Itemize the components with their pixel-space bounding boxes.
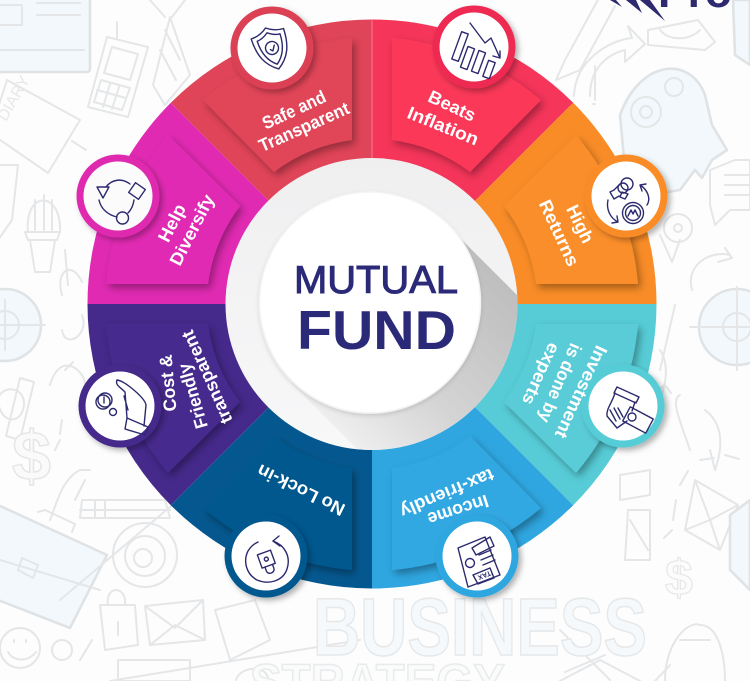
panel: Investment is done by experts [504,324,664,473]
label: Help Diversify: Diversify [166,191,218,269]
label: Cost Friendly transparent: Cost & [156,354,180,412]
icon: hand with coins [96,380,148,435]
icon: hand with cash [607,387,653,433]
label: Income tax-friendly: Income [425,491,491,529]
panel: Income tax-friendly [392,436,541,598]
wheel sectors [88,20,656,588]
icon: shield [249,23,295,74]
icon: unlock cycle [246,536,288,582]
label: Investment is done by experts: experts [518,340,564,408]
center hub [226,158,518,450]
label: No Lock-in: No Lock-in [254,460,348,520]
label: Investment is done by experts: is done by [534,340,586,426]
title: MUTUAL FUND [294,259,458,361]
panel: Safe and Transparent [203,6,352,172]
panel: No Lock-in [203,436,352,598]
label: Beats Inflation: Beats [425,86,479,126]
icon: tax document: TAX [476,569,492,581]
panel: High Returns [504,135,668,284]
panel: Cost Friendly transparent [78,324,240,473]
label: Investment is done by experts: Investment [551,342,611,442]
background doodles: BUSINESS [313,582,647,673]
label: Cost Friendly transparent: transparent [178,327,236,427]
logo fragment [610,0,732,21]
icon: falling bars [452,23,500,79]
label: Income tax-friendly: tax-friendly [397,464,497,522]
title: MUTUAL FUND: MUTUAL [294,259,458,302]
label: High Returns: High [562,202,598,246]
label: Investment is done by experts [518,340,611,442]
label: Help Diversify: Help [154,201,190,245]
icon: tax document [458,537,500,587]
label: Beats Inflation: Inflation [404,103,482,149]
background doodles: $ [12,417,51,495]
label: Beats Inflation [404,86,482,149]
background doodles: $ [665,550,693,606]
label: Cost Friendly transparent [156,327,236,431]
icon: returns cycle [607,178,649,224]
label: Cost Friendly transparent: Friendly [174,361,212,431]
panel: Beats Inflation [392,6,541,172]
label: Safe and Transparent: Safe and [259,87,329,133]
title: MUTUAL FUND: FUND [297,299,456,361]
icon: shapes cycle [97,180,145,224]
panel: Help Diversify [76,135,240,284]
label: High Returns: Returns [535,197,583,269]
label: Safe and Transparent: Transparent [256,98,352,156]
